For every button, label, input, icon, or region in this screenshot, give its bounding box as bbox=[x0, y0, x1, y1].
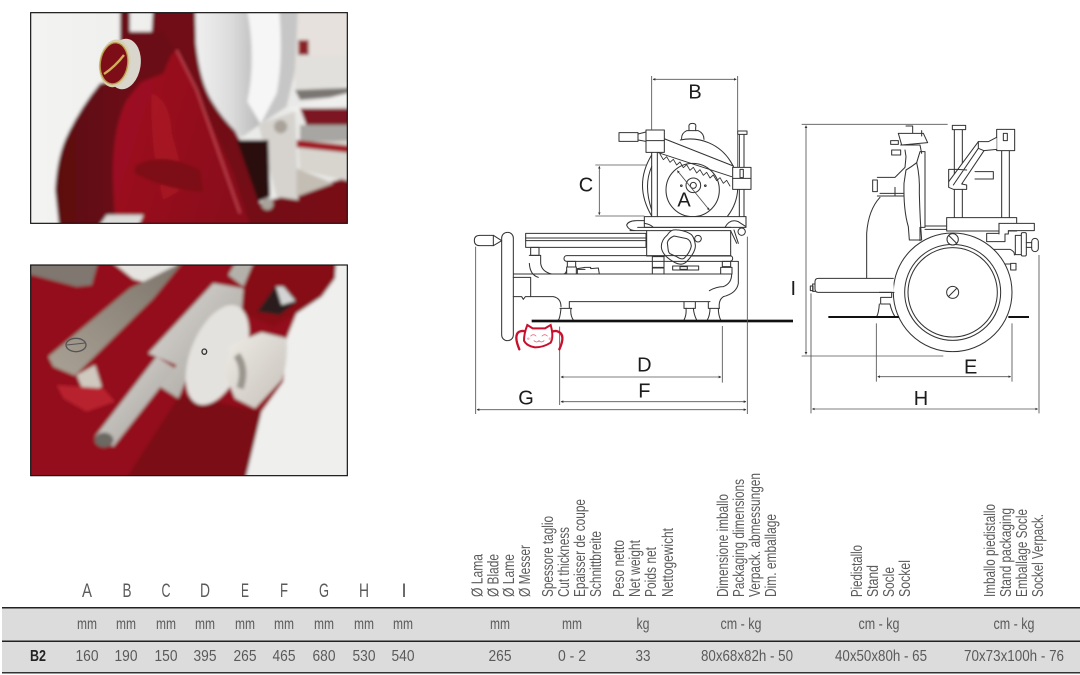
values row: model B2: 190 bbox=[114, 648, 138, 665]
rotated header: stand packaging: Imballo piedistallo bbox=[982, 504, 999, 597]
column headers: dimension letters: G bbox=[319, 581, 329, 602]
rotated header: stand: Socle bbox=[881, 567, 898, 597]
units row: cm - kg bbox=[720, 616, 762, 633]
values row: model B2: 395 bbox=[194, 648, 216, 665]
rotated header: net weight bbox=[611, 527, 677, 597]
dimension labels: B bbox=[688, 82, 702, 104]
dimension labels bbox=[518, 82, 702, 410]
rotated header: packaging dimensions: Packaging dimensions bbox=[731, 479, 748, 597]
column headers: dimension letters: C bbox=[162, 581, 170, 602]
dimension labels bbox=[791, 278, 977, 410]
rotated header: blade diameter bbox=[470, 545, 534, 597]
rotated header: packaging dimensions: Dim. emballage bbox=[763, 514, 780, 597]
values row: model B2: 70x73x100h - 76 bbox=[964, 648, 1064, 665]
values row: model B2: B2 bbox=[30, 648, 46, 665]
units row: cm - kg bbox=[858, 616, 900, 633]
values row: model B2: 540 bbox=[392, 648, 415, 665]
dimension lines bbox=[802, 124, 1039, 413]
diagram: side view of slicer bbox=[474, 76, 793, 414]
units row: mm bbox=[77, 616, 97, 633]
rotated header: stand bbox=[849, 545, 914, 597]
photo: slicer blade and red body bbox=[30, 12, 348, 224]
icon: red cat mascot bbox=[516, 325, 562, 349]
rotated header: stand packaging: Stand packaging bbox=[998, 508, 1015, 597]
ground lines bbox=[828, 316, 1029, 318]
rotated header: net weight: Net weight bbox=[627, 539, 644, 597]
units row: mm bbox=[354, 616, 374, 633]
values row: model B2: 265 bbox=[234, 648, 256, 665]
units row: cm - kg bbox=[994, 616, 1034, 633]
dimension labels: E bbox=[964, 357, 977, 379]
column headers: dimension letters: H bbox=[359, 581, 369, 602]
rotated header: packaging dimensions: Dimensione imballo bbox=[715, 494, 732, 597]
rotated header: stand: Sockel bbox=[897, 560, 914, 597]
values row: model B2: 80x68x82h - 50 bbox=[701, 648, 793, 665]
rotated header: stand: Stand bbox=[865, 565, 882, 597]
column headers: dimension letters: D bbox=[200, 581, 210, 602]
machine outline bbox=[810, 125, 1038, 352]
dimension lines bbox=[476, 76, 747, 414]
rotated header: cut thickness: Cut thickness bbox=[556, 527, 573, 597]
column headers: dimension letters: A bbox=[82, 581, 92, 602]
dimension labels: H bbox=[914, 388, 928, 410]
units row: mm bbox=[156, 616, 176, 633]
rotated header: stand packaging: Sockel Verpack. bbox=[1030, 514, 1047, 597]
values row: model B2: 160 bbox=[76, 648, 99, 665]
ground line bbox=[532, 320, 793, 322]
photo: thickness dial knob bbox=[30, 264, 348, 476]
values row: model B2: 465 bbox=[272, 648, 296, 665]
rotated header: blade diameter: Ø Messer bbox=[517, 545, 534, 597]
dimension labels: G bbox=[518, 388, 534, 410]
rotated header: cut thickness: Epaisser de coupe bbox=[572, 499, 589, 597]
rotated header: net weight: Peso netto bbox=[611, 540, 628, 597]
units row: mm bbox=[490, 616, 510, 633]
blade and carriage bbox=[474, 123, 751, 341]
rotated header: blade diameter: Ø Blade bbox=[486, 554, 502, 597]
table bands bbox=[2, 607, 1080, 674]
values row: model B2: 530 bbox=[352, 648, 376, 665]
diagram: front view of slicer bbox=[791, 124, 1039, 413]
dimension labels: I bbox=[791, 278, 796, 300]
dimension labels: C bbox=[579, 174, 593, 196]
values row: model B2: 40x50x80h - 65 bbox=[835, 648, 927, 665]
units row: mm bbox=[116, 616, 136, 633]
rotated header: net weight: Poids net bbox=[643, 546, 660, 597]
rotated header: blade diameter: Ø Lama bbox=[470, 554, 486, 597]
column headers: dimension letters: E bbox=[241, 581, 249, 602]
units row bbox=[77, 616, 1034, 633]
rotated header: cut thickness: Spessore taglio bbox=[540, 516, 557, 597]
column headers: dimension letters: B bbox=[122, 581, 132, 602]
column headers: dimension letters bbox=[82, 581, 407, 602]
values row: model B2: 265 bbox=[488, 648, 512, 665]
rotated header: stand packaging: Emballage Socle bbox=[1014, 509, 1031, 597]
units row: mm bbox=[314, 616, 334, 633]
rotated header: packaging dimensions: Verpack. abmessungen bbox=[747, 473, 764, 597]
values row: model B2: 680 bbox=[312, 648, 336, 665]
dimension labels: D bbox=[637, 355, 652, 377]
logo badge bbox=[98, 38, 141, 90]
rotated header: packaging dimensions bbox=[715, 473, 780, 597]
values row: model B2 bbox=[30, 648, 1064, 665]
units row: mm bbox=[393, 616, 413, 633]
rotated header: blade diameter: Ø Lame bbox=[501, 554, 518, 597]
rotated header: stand packaging bbox=[982, 504, 1047, 597]
units row: kg bbox=[636, 616, 650, 633]
rotated header: cut thickness bbox=[540, 499, 605, 597]
units row: mm bbox=[274, 616, 294, 633]
values row: model B2: 150 bbox=[154, 648, 178, 665]
units row: mm bbox=[195, 616, 215, 633]
dimension labels: F bbox=[638, 380, 650, 402]
values row: model B2: 0 - 2 bbox=[558, 648, 586, 665]
units row: mm bbox=[235, 616, 255, 633]
column headers: dimension letters: F bbox=[280, 581, 288, 602]
rotated header: cut thickness: Schnittbreite bbox=[588, 531, 605, 597]
units row: mm bbox=[562, 616, 582, 633]
rotated header: stand: Piedistallo bbox=[849, 545, 866, 597]
values row: model B2: 33 bbox=[636, 648, 650, 665]
dimension labels: A bbox=[677, 190, 691, 212]
column headers: dimension letters: I bbox=[401, 581, 407, 602]
rotated header: net weight: Nettogewicht bbox=[660, 527, 677, 597]
